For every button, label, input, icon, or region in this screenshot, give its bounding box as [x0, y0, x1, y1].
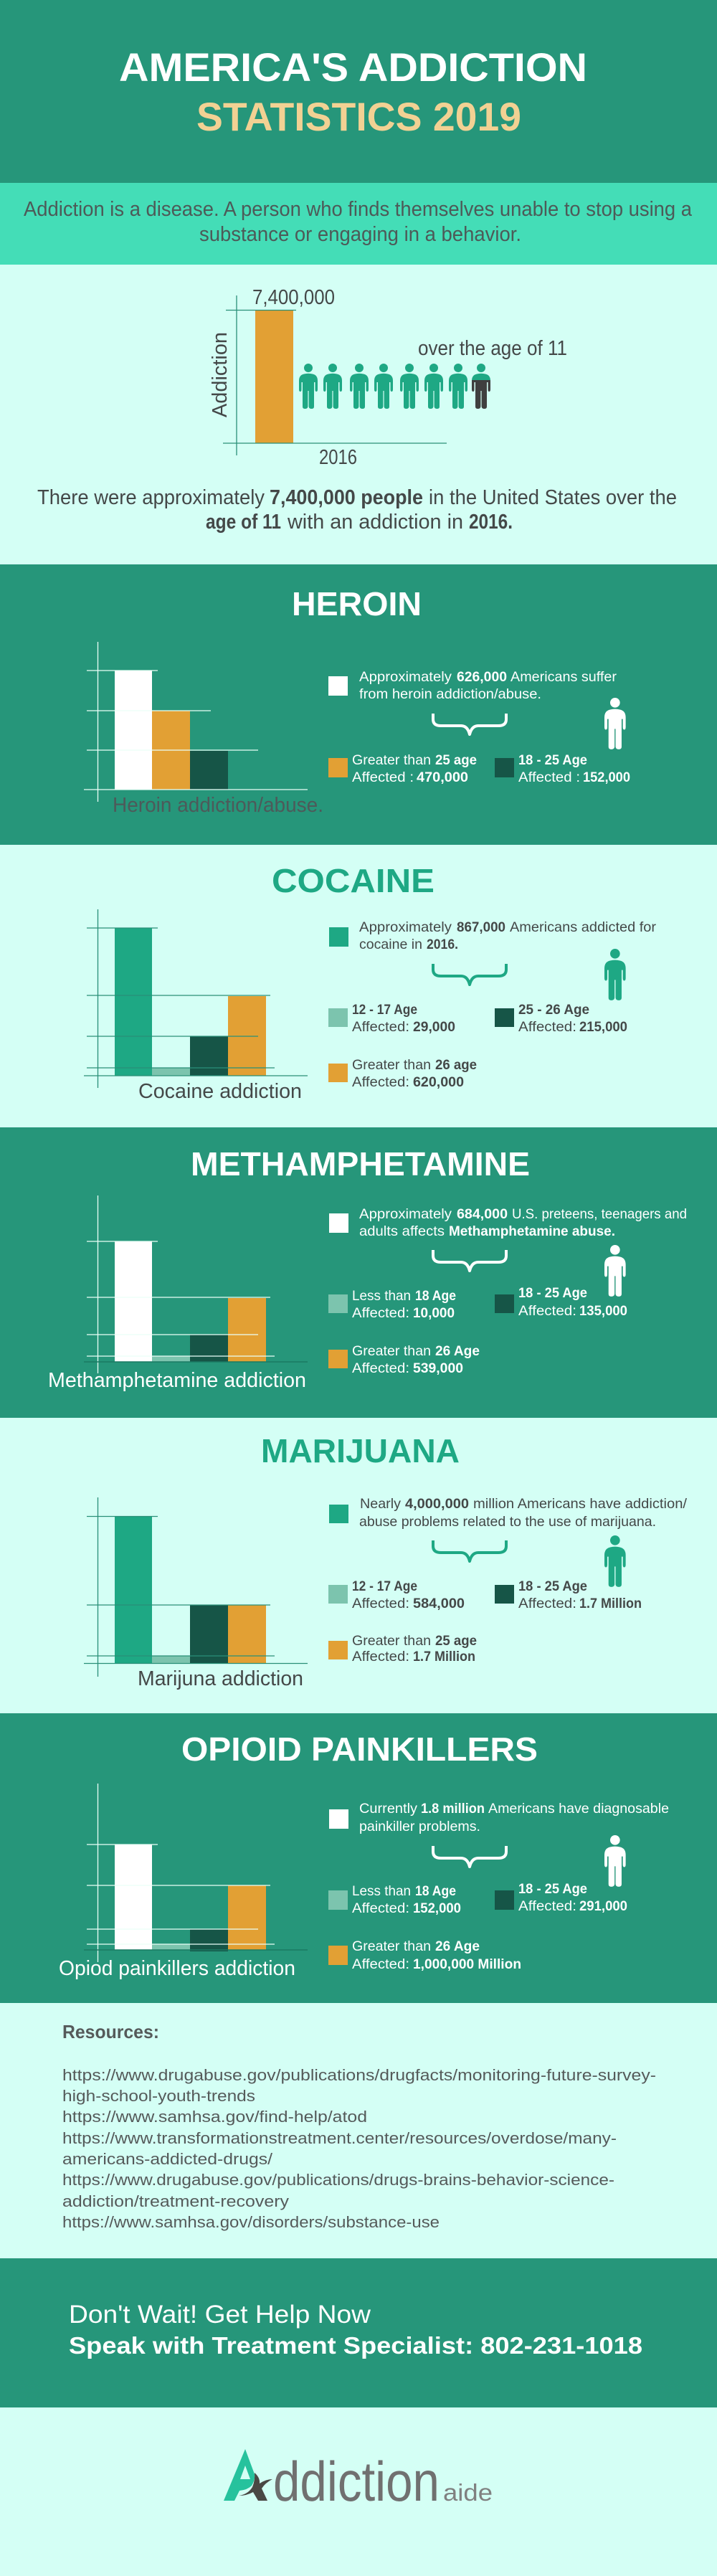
legend: cocaine: 867,000 [457, 919, 505, 935]
resources heading: Resources: [62, 2021, 159, 2042]
legend: cocaine: Approximately [359, 919, 452, 935]
legend: opioid painkillers: 1.8 million [421, 1801, 485, 1817]
legend: methamphetamine: 18 Age [415, 1288, 456, 1304]
legend: marijuana: 18 - 25 Age [518, 1578, 587, 1594]
legend: heroin: 18 - 25 Age [518, 752, 587, 768]
definition band [0, 183, 717, 265]
overview statement: age of 11 [206, 511, 281, 534]
legend: marijuana: 1.7 Million [413, 1649, 475, 1665]
bar chart: marijuana [84, 1497, 308, 1690]
legend: heroin: 626,000 [457, 669, 507, 685]
legend: cocaine: Greater than [352, 1057, 431, 1073]
legend: cocaine: 215,000 [579, 1019, 627, 1035]
title: STATISTICS 2019 [196, 94, 521, 139]
icon: person [604, 1245, 626, 1297]
overview statement: There were approximately [37, 486, 265, 509]
legend: cocaine: Affected: [518, 1019, 576, 1035]
resources links: https://www.drugabuse.gov/publications/drugs-brains-behavior-science- [62, 2171, 614, 2189]
legend: heroin: 25 age [435, 752, 477, 768]
heading: marijuana: MARIJUANA [261, 1432, 460, 1469]
overview bar chart [209, 286, 447, 469]
bar chart: heroin: Heroin addiction/abuse. [113, 794, 323, 817]
bar chart: cocaine [84, 909, 308, 1103]
legend: marijuana [328, 1496, 688, 1665]
legend: cocaine: Affected: [352, 1074, 409, 1090]
resources links: https://www.drugabuse.gov/publications/drugfacts/monitoring-future-survey- [62, 2066, 656, 2084]
legend: marijuana: Affected: [352, 1596, 409, 1611]
legend: marijuana: 12 - 17 Age [352, 1578, 417, 1594]
legend: opioid painkillers: Affected: [518, 1898, 576, 1914]
bar chart: cocaine: Cocaine addiction [138, 1080, 302, 1103]
logo: Addiction aide: aide [443, 2479, 493, 2506]
panel: cocaine [0, 845, 717, 1127]
legend: methamphetamine: Affected: [352, 1360, 409, 1376]
bar chart: marijuana: Marijuna addiction [138, 1667, 303, 1690]
over the age of 11 label: over the age of 11 [418, 337, 567, 360]
legend: methamphetamine: Less than [352, 1288, 411, 1304]
legend: marijuana: million Americans have addiction/ [473, 1496, 688, 1512]
overview bar chart: 7,400,000 [252, 286, 335, 309]
legend: opioid painkillers: Affected: [352, 1900, 409, 1916]
icon: person [604, 1535, 626, 1587]
legend: methamphetamine: Methamphetamine abuse. [449, 1223, 615, 1239]
legend: cocaine: 26 age [435, 1057, 477, 1073]
logo: Addiction aide: ddiction [273, 2450, 440, 2513]
overview statement: 2016. [469, 511, 513, 534]
icon: brace [433, 715, 506, 734]
legend: marijuana: Nearly [360, 1496, 401, 1512]
legend: cocaine: 2016. [427, 937, 458, 952]
resources links: americans-addicted-drugs/ [62, 2150, 273, 2168]
legend: cocaine: Americans addicted for [510, 919, 657, 935]
legend: cocaine: 29,000 [413, 1019, 455, 1035]
legend: marijuana: 1.7 Million [579, 1596, 642, 1611]
resources links: https://www.transformationstreatment.center/resources/overdose/many- [62, 2129, 617, 2147]
definition band: substance or engaging in a behavior. [199, 223, 521, 246]
bar chart: methamphetamine: Methamphetamine addiction [48, 1369, 306, 1392]
legend: opioid painkillers: 152,000 [413, 1900, 461, 1916]
legend: heroin: Greater than [352, 752, 431, 768]
resources links: https://www.samhsa.gov/disorders/substance-use [62, 2213, 440, 2231]
header panel [0, 0, 717, 183]
legend: methamphetamine: 18 - 25 Age [518, 1285, 587, 1301]
legend: methamphetamine: 539,000 [413, 1360, 463, 1376]
legend: heroin [328, 669, 630, 785]
resources links: https://www.samhsa.gov/find-help/atod [62, 2108, 367, 2126]
legend: methamphetamine: 10,000 [413, 1305, 455, 1321]
icon: brace [433, 1847, 506, 1867]
panel: call to action: Don't Wait! Get Help Now [69, 2301, 371, 2329]
legend: marijuana: Affected: [518, 1596, 576, 1611]
heading: cocaine: COCAINE [272, 862, 435, 899]
legend: cocaine: Affected: [352, 1019, 409, 1035]
panel: resources [0, 2003, 717, 2258]
legend: cocaine: 12 - 17 Age [352, 1002, 417, 1018]
legend: opioid painkillers: Greater than [352, 1938, 431, 1954]
panel: heroin [0, 564, 717, 845]
resources links [62, 2066, 656, 2231]
title [119, 44, 587, 139]
legend: cocaine: cocaine in [359, 937, 422, 952]
legend: heroin: 152,000 [583, 770, 630, 785]
legend: heroin: Americans suffer [511, 669, 617, 685]
legend: marijuana: Affected: [352, 1649, 409, 1665]
legend: marijuana: Greater than [352, 1633, 431, 1649]
legend: opioid painkillers: 1,000,000 Million [413, 1956, 521, 1972]
resources links: high-school-youth-trends [62, 2087, 255, 2105]
legend: marijuana: 584,000 [413, 1596, 465, 1611]
overview statement: 7,400,000 people [270, 486, 423, 509]
overview bar chart: Addiction [209, 332, 232, 417]
icon: brace [433, 1542, 506, 1561]
legend: opioid painkillers: 26 Age [435, 1938, 480, 1954]
legend: opioid painkillers: Americans have diagnosable [488, 1801, 669, 1817]
legend: heroin: Approximately [359, 669, 452, 685]
legend: cocaine [328, 919, 657, 1090]
panel: overview [0, 265, 717, 564]
legend: methamphetamine: U.S. preteens, teenagers and [512, 1206, 687, 1222]
legend: opioid painkillers: painkiller problems. [359, 1819, 480, 1834]
legend: marijuana: abuse problems related to the use of marijuana. [359, 1514, 656, 1530]
panel: call to action [0, 2258, 717, 2407]
overview statement: with an addiction in [287, 511, 463, 534]
legend: methamphetamine: Affected: [352, 1305, 409, 1321]
heading: methamphetamine: METHAMPHETAMINE [191, 1145, 530, 1183]
overview statement [37, 486, 677, 534]
legend: heroin: Affected : [518, 770, 580, 785]
panel: marijuana [0, 1418, 717, 1713]
legend: methamphetamine: 135,000 [579, 1303, 627, 1319]
legend: methamphetamine: Affected: [518, 1303, 576, 1319]
legend: methamphetamine: 26 Age [435, 1343, 480, 1359]
legend: opioid painkillers [328, 1801, 669, 1972]
legend: cocaine: 25 - 26 Age [518, 1002, 589, 1018]
resources links: addiction/treatment-recovery [62, 2192, 290, 2210]
legend: marijuana: 4,000,000 [405, 1496, 469, 1512]
icon: person [604, 949, 626, 1000]
panel: opioid painkillers [0, 1713, 717, 2003]
panel: footer [0, 2407, 717, 2576]
legend: opioid painkillers: 18 Age [415, 1883, 456, 1899]
icon: person [604, 1835, 626, 1887]
panel: methamphetamine [0, 1127, 717, 1418]
legend: opioid painkillers: 18 - 25 Age [518, 1881, 587, 1897]
icon: person [604, 698, 626, 749]
legend: opioid painkillers: Currently [359, 1801, 417, 1817]
icon: brace [433, 1251, 506, 1271]
icon: row of people [299, 364, 490, 409]
bar chart: methamphetamine [48, 1195, 308, 1392]
legend: methamphetamine: adults affects [359, 1223, 445, 1239]
overview statement: in the United States over the [429, 486, 677, 509]
bar chart: opioid painkillers [59, 1784, 308, 1980]
legend: opioid painkillers: Affected: [352, 1956, 409, 1972]
heading: opioid painkillers: OPIOID PAINKILLERS [181, 1730, 538, 1768]
legend: cocaine: 620,000 [413, 1074, 464, 1090]
legend: heroin: Affected : [352, 770, 414, 785]
overview bar chart: 2016 [319, 446, 357, 469]
legend: heroin: 470,000 [417, 770, 468, 785]
legend: opioid painkillers: Less than [352, 1883, 411, 1899]
definition band: Addiction is a disease. A person who finds themselves unable to stop using a [24, 198, 693, 221]
legend: heroin: from heroin addiction/abuse. [359, 686, 541, 702]
panel: call to action: Speak with Treatment Specialist: 802-231-1018 [69, 2332, 642, 2359]
legend: marijuana: 25 age [435, 1633, 477, 1649]
legend: methamphetamine: Greater than [352, 1343, 431, 1359]
icon: brace [433, 965, 506, 985]
legend: methamphetamine [328, 1206, 687, 1376]
heading: heroin: HEROIN [292, 585, 422, 622]
title: AMERICA'S ADDICTION [119, 44, 587, 90]
bar chart: heroin [84, 642, 323, 817]
bar chart: opioid painkillers: Opiod painkillers addiction [59, 1957, 295, 1980]
legend: methamphetamine: 684,000 [457, 1206, 508, 1222]
legend: methamphetamine: Approximately [359, 1206, 452, 1222]
legend: opioid painkillers: 291,000 [579, 1898, 627, 1914]
